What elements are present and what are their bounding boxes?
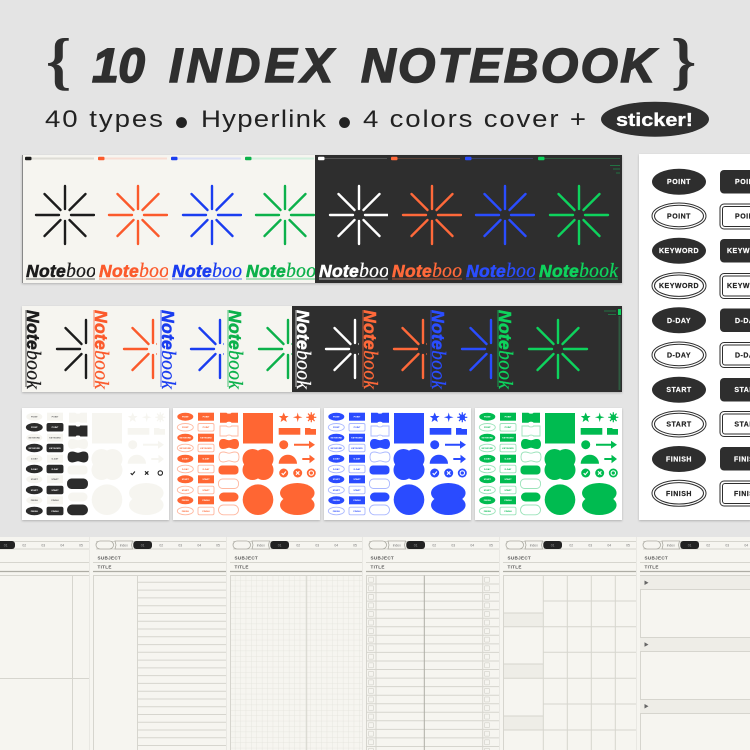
- panel: large label stickers: [639, 154, 750, 520]
- side cover: green on cream: [224, 306, 317, 392]
- oval labels: START: [666, 422, 692, 428]
- side cover: green on dark: Note book: [494, 310, 515, 389]
- oval labels: START: [666, 387, 692, 394]
- sticker sheet: orange: [173, 408, 320, 520]
- title: 10 index notebook with braces: 10: [92, 40, 145, 93]
- oval labels: POINT: [667, 214, 691, 220]
- subtitle: Hyperlink: [201, 107, 326, 133]
- panel: side-title covers row: [22, 306, 622, 392]
- cover: black on cream: Notebook: [26, 261, 105, 282]
- notebook page: checklist: [362, 537, 499, 750]
- cover: blue on cream: [168, 155, 251, 283]
- side cover: orange on cream: [89, 306, 182, 392]
- cover: green on dark: Notebook: [539, 261, 618, 282]
- side cover: blue on dark: [427, 306, 520, 392]
- cover: blue on cream: Notebook: [172, 261, 251, 282]
- sticker sheet: monochrome: [22, 408, 169, 520]
- title: 10 index notebook with braces: INDEX: [169, 40, 336, 93]
- subtitle: 40 types: [45, 107, 163, 133]
- subtitle: •: [338, 101, 352, 145]
- side cover: black on cream: [22, 306, 115, 392]
- oval labels: [652, 169, 706, 506]
- cover: black on cream: [22, 155, 105, 283]
- oval labels: KEYWORD: [659, 283, 699, 290]
- title: 10 index notebook with braces: [46, 25, 696, 96]
- sticker sheet: blue: [324, 408, 471, 520]
- sticker badge: sticker!: [616, 110, 693, 130]
- side cover: green on dark: [494, 306, 622, 392]
- side cover: green on cream: Note book: [224, 310, 245, 389]
- notebook page: blank columns: [0, 537, 89, 750]
- side cover: white on dark: [292, 306, 384, 392]
- oval labels: KEYWORD: [659, 248, 699, 255]
- cover: white on dark: [315, 155, 398, 283]
- sticker sheet: green: [475, 408, 622, 520]
- side cover: orange on dark: Note book: [359, 310, 380, 389]
- oval labels: D-DAY: [667, 318, 691, 325]
- rectangular labels: [720, 170, 750, 506]
- oval labels: FINISH: [666, 456, 692, 464]
- side cover: blue on cream: [157, 306, 249, 392]
- subtitle: •: [174, 101, 189, 145]
- notebook page: sections: [636, 537, 750, 750]
- side cover: black on cream: Note book: [22, 310, 43, 389]
- cover: orange on cream: [95, 155, 178, 283]
- cover: blue on dark: [462, 155, 545, 283]
- notebook page: lined with margin: [89, 537, 226, 750]
- side cover: blue on cream: Note book: [157, 310, 178, 389]
- title: 10 index notebook with braces: }: [671, 25, 696, 96]
- side cover: orange on cream: Note book: [90, 310, 111, 389]
- cover: green on dark: [535, 155, 622, 283]
- cover: orange on dark: Notebook: [392, 261, 471, 282]
- panel: front covers row: [22, 155, 622, 283]
- cover: white on dark: Notebook: [319, 261, 398, 282]
- cover: green on cream: Notebook: [246, 261, 325, 282]
- title: 10 index notebook with braces: {: [46, 25, 71, 96]
- cover: blue on dark: Notebook: [466, 261, 545, 282]
- title: 10 index notebook with braces: NOTEBOOK: [361, 40, 658, 93]
- subtitle: [45, 101, 586, 145]
- section markers: [644, 580, 648, 708]
- side cover: white on dark: Note book: [292, 310, 313, 389]
- cover: orange on dark: [388, 155, 471, 283]
- cover: green on cream: [242, 155, 325, 283]
- side cover: orange on dark: [359, 306, 452, 392]
- oval labels: POINT: [667, 179, 691, 186]
- subtitle: 4 colors cover +: [363, 107, 586, 133]
- cover: orange on cream: Notebook: [99, 261, 178, 282]
- oval labels: FINISH: [666, 491, 692, 498]
- notebook page: grid: [226, 537, 363, 750]
- sticker badge: [601, 102, 709, 137]
- side cover: blue on dark: Note book: [427, 310, 448, 389]
- notebook page: timetable: [499, 537, 636, 750]
- oval labels: D-DAY: [667, 352, 691, 360]
